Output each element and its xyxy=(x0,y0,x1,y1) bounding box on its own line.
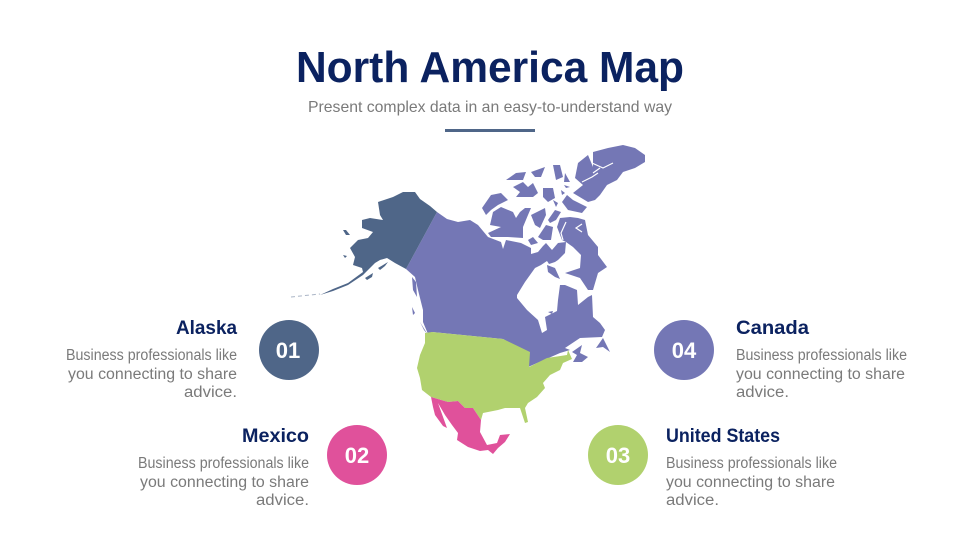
badge 03 xyxy=(588,425,648,485)
item: Canada xyxy=(654,318,907,401)
title underline xyxy=(445,129,535,132)
text: Alaska description: you connecting to share xyxy=(68,366,237,383)
heading: Canada: Canada xyxy=(736,318,809,339)
map of North America xyxy=(291,145,645,454)
text: Canada description: you connecting to share xyxy=(736,366,905,383)
text: Alaska description xyxy=(66,347,237,401)
text: Mexico description: Business professionals like xyxy=(138,455,309,472)
text: Mexico description xyxy=(138,455,309,509)
fjords and channels xyxy=(561,163,613,257)
badge 03: 03 xyxy=(606,443,630,468)
badge 01 xyxy=(259,320,319,380)
text: Canada description xyxy=(736,347,907,401)
heading: United States: United States xyxy=(666,426,780,447)
region: United States xyxy=(417,332,572,423)
badge 04: 04 xyxy=(672,338,697,363)
text: Mexico description: advice. xyxy=(256,492,309,509)
text: Mexico description: you connecting to share xyxy=(140,474,309,491)
region: Mexico xyxy=(431,397,510,454)
region: Alaska xyxy=(291,192,437,297)
badge 04 xyxy=(654,320,714,380)
badge 02 xyxy=(327,425,387,485)
heading: Mexico: Mexico xyxy=(242,426,309,447)
text: United States description: advice. xyxy=(666,492,719,509)
text: United States description: Business professionals like xyxy=(666,455,837,472)
item: Alaska xyxy=(66,318,319,401)
text: United States description: you connecting to share xyxy=(666,474,835,491)
text: Canada description: Business professionals like xyxy=(736,347,907,364)
subtitle: Present complex data in an easy-to-understand way xyxy=(308,99,672,116)
text: Canada description: advice. xyxy=(736,384,789,401)
title: North America Map xyxy=(296,43,684,92)
item: United States xyxy=(588,425,837,509)
region: Canada xyxy=(406,145,645,367)
text: Alaska description: advice. xyxy=(184,384,237,401)
item: Mexico xyxy=(138,425,387,509)
badge 02: 02 xyxy=(345,443,369,468)
heading: Alaska: Alaska xyxy=(176,318,237,339)
badge 01: 01 xyxy=(276,338,300,363)
text: Alaska description: Business professionals like xyxy=(66,347,237,364)
text: United States description xyxy=(666,455,837,509)
